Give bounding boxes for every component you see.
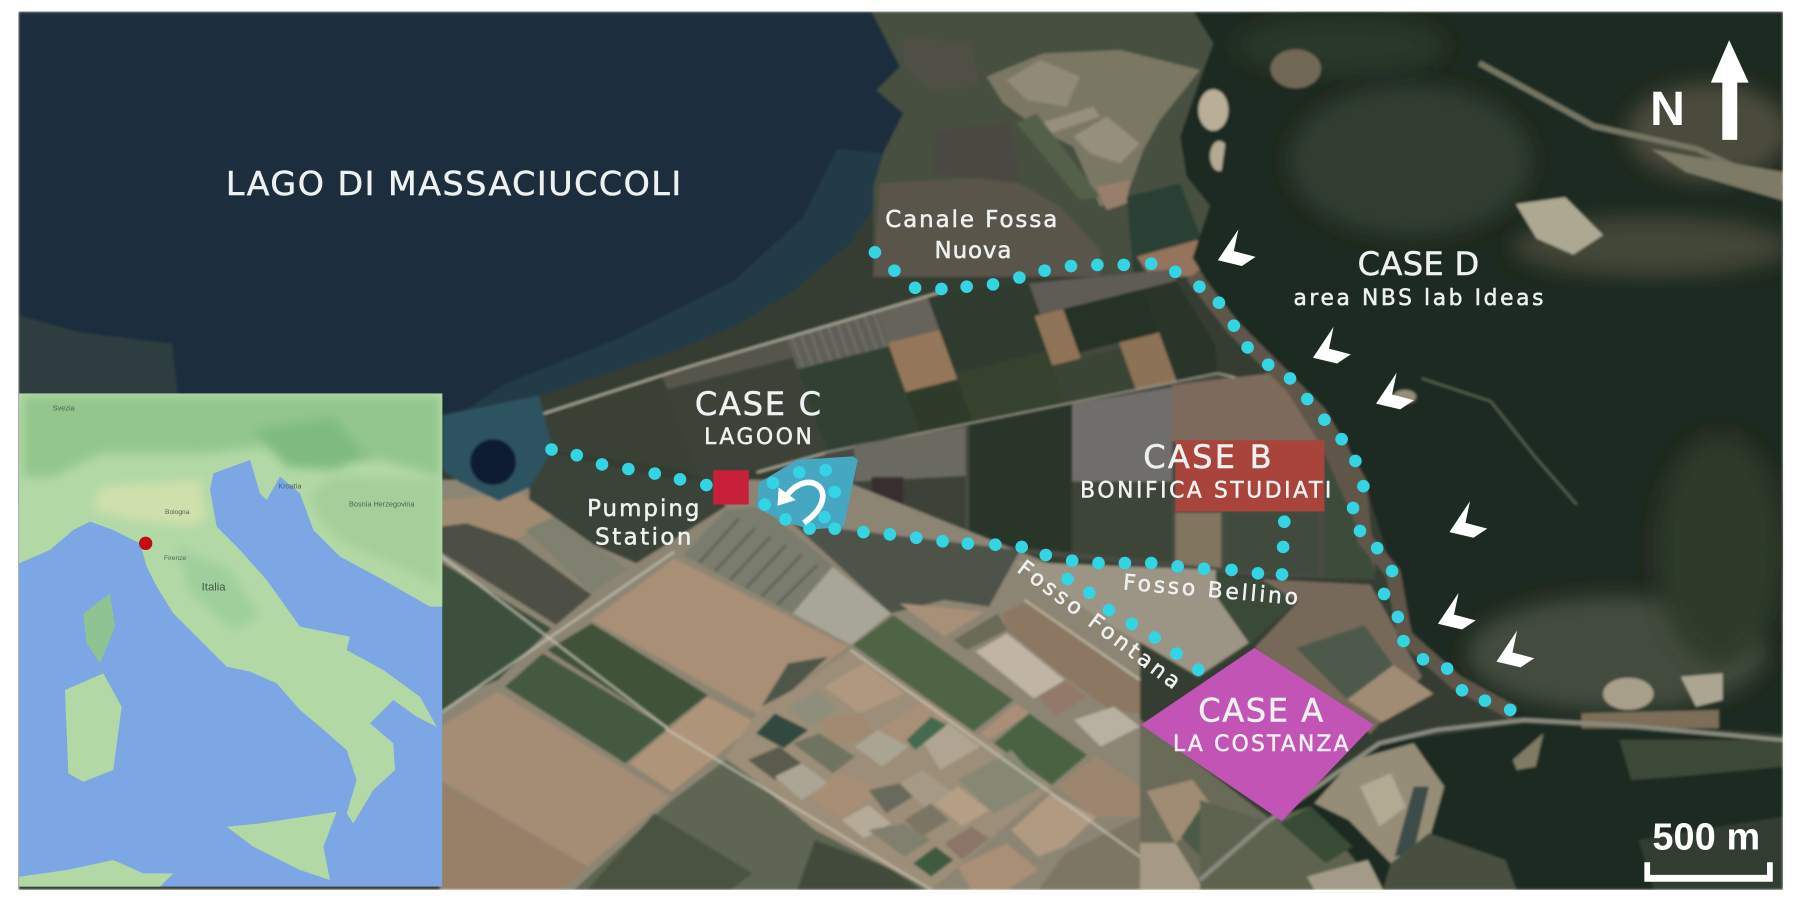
scale bar bbox=[1644, 817, 1773, 882]
case A area bbox=[1141, 648, 1374, 821]
label: Fosso Bellino: Fosso Bellino bbox=[1122, 570, 1299, 611]
icon: forest chevrons bbox=[1218, 229, 1534, 667]
fields around Fosso Bellino bbox=[1015, 562, 1433, 734]
inset labels: Svezia bbox=[53, 404, 76, 413]
label: case B bbox=[1080, 438, 1331, 504]
label: case A: LA COSTANZA bbox=[1173, 732, 1349, 757]
east bank strip bbox=[1193, 275, 1514, 713]
label: pumping station bbox=[587, 496, 699, 551]
inset labels: Kroatia bbox=[278, 482, 302, 491]
icon: U-turn flow arrow bbox=[777, 482, 823, 523]
label: pumping station: Pumping bbox=[587, 496, 699, 522]
label: case D: area NBS lab Ideas bbox=[1293, 286, 1543, 311]
scale bar: 500 m bbox=[1652, 817, 1760, 859]
label: case B: CASE B bbox=[1143, 438, 1272, 476]
wetland near outlet bbox=[443, 396, 553, 501]
label: lake name: LAGO DI MASSACIUCCOLI bbox=[226, 164, 681, 203]
label: Fosso Fontana: Fosso Fontana bbox=[1012, 556, 1185, 695]
label: case C: LAGOON bbox=[704, 425, 812, 450]
label: case D: CASE D bbox=[1358, 245, 1479, 283]
label: case D bbox=[1293, 245, 1543, 311]
inset labels: Firenze bbox=[164, 555, 186, 562]
middle field block bbox=[820, 372, 1376, 578]
northern marsh and hillside bbox=[872, 12, 1260, 277]
land around road and quarry bbox=[1200, 673, 1783, 890]
label: Canale Fossa Nuova: Canale Fossa bbox=[885, 207, 1057, 233]
Corsica bbox=[83, 593, 115, 663]
North Africa coast bbox=[19, 860, 173, 887]
lake bbox=[18, 11, 904, 505]
pumping station marker bbox=[713, 470, 749, 505]
area between route and pumping station bbox=[530, 453, 706, 505]
label: case A: CASE A bbox=[1198, 691, 1323, 729]
label: pumping station: Station bbox=[595, 525, 691, 551]
label: case B: BONIFICA STUDIATI bbox=[1080, 479, 1331, 504]
field roads bbox=[542, 290, 1238, 475]
small fields below case A bbox=[1138, 719, 1268, 890]
south field mosaic bbox=[440, 480, 1140, 890]
north arrow bbox=[1650, 40, 1749, 140]
Sardinia bbox=[65, 673, 122, 782]
label: case A bbox=[1173, 691, 1349, 757]
inset map of Italy bbox=[19, 393, 442, 887]
label: Canale Fossa Nuova: Nuova bbox=[935, 238, 1011, 264]
northern terrain tones bbox=[23, 397, 440, 630]
label: case C bbox=[695, 385, 821, 450]
north field block bbox=[662, 268, 1216, 394]
case C lagoon area bbox=[757, 456, 858, 530]
label: case C: CASE C bbox=[695, 385, 821, 423]
water route dots bbox=[545, 246, 1516, 716]
inset labels bbox=[53, 404, 416, 594]
case B area bbox=[1175, 440, 1324, 511]
Italian peninsula and mainland bbox=[19, 393, 442, 823]
label: Canale Fossa Nuova bbox=[885, 207, 1057, 264]
forest bbox=[1193, 11, 1789, 734]
Sicily bbox=[227, 812, 337, 880]
inset labels: Italia bbox=[202, 582, 226, 594]
town bbox=[987, 50, 1200, 207]
location marker bbox=[139, 537, 152, 550]
inset labels: Bosnia Herzegovina bbox=[349, 500, 416, 509]
inset labels: Bologna bbox=[165, 509, 190, 516]
north arrow: N bbox=[1650, 82, 1685, 136]
